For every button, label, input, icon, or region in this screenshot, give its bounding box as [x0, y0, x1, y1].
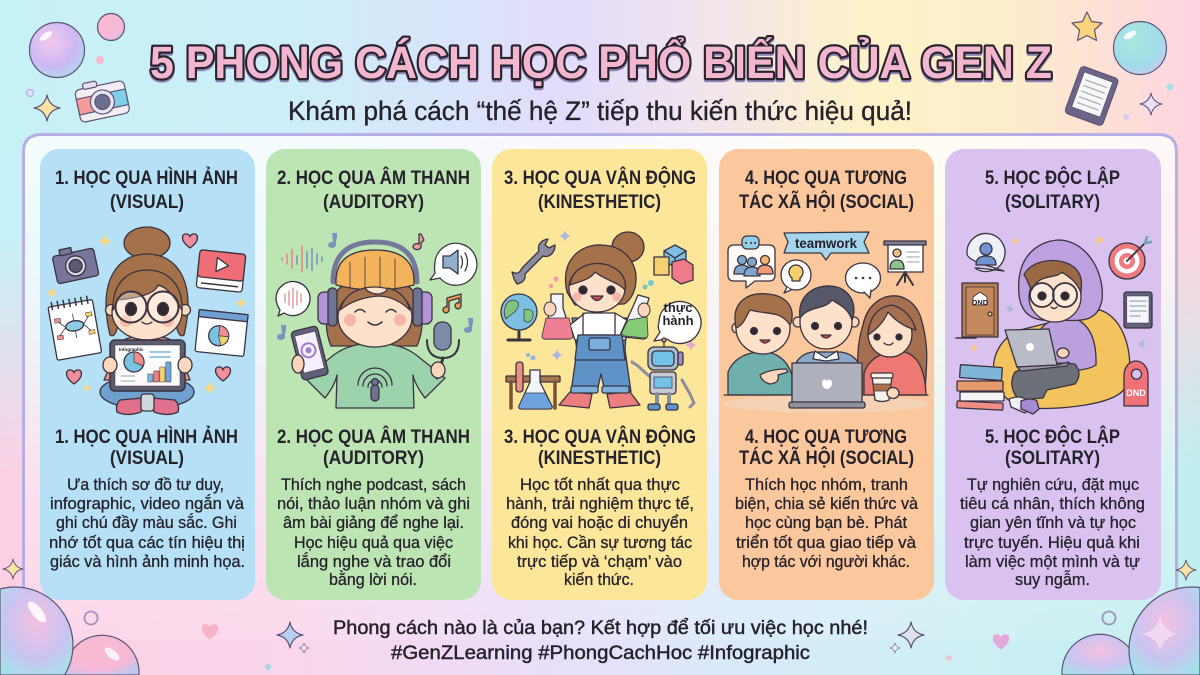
illustration: girl with tablet: Infographic [119, 347, 144, 352]
description: card 2: Thích nghe podcast, sách [281, 475, 466, 494]
description: card 4: Thích học nhóm, tranh [745, 475, 908, 494]
illustration: girl with tablet [46, 227, 248, 414]
heading: card 1 bottom: 1. HỌC QUA HÌNH ẢNH [55, 425, 238, 448]
illustration: three friends with laptop: teamwork [795, 236, 857, 251]
description: card 3: hành, trải nghiệm thực tế, [506, 494, 694, 513]
decoration: top right star, bubble and e-reader [1064, 12, 1174, 126]
heading: card 3 top: (KINESTHETIC) [538, 191, 661, 213]
description: card 4: học cùng bạn bè. Phát [745, 513, 907, 532]
heading: card 5 top [985, 165, 1120, 213]
description: card 5: làm việc một mình và tự [965, 552, 1140, 571]
description: card 3: khi học. Cần sự tương tác [508, 533, 692, 552]
panel: card 4 social [719, 149, 934, 600]
description: card 1: infographic, video ngắn và [50, 494, 245, 513]
main panel [24, 134, 1176, 640]
heading: card 2 top [277, 165, 470, 213]
description: card 5: trực tuyến. Hiệu quả khi [964, 533, 1140, 552]
description: card 5 [960, 475, 1145, 589]
heading: card 1 bottom [55, 425, 238, 469]
heading: card 4 bottom: TÁC XÃ HỘI (SOCIAL) [739, 445, 914, 469]
illustration: girl with flasks [501, 230, 701, 410]
decoration: bottom right bubbles [890, 560, 1200, 675]
description: card 3: đóng vai hoặc di chuyển [511, 513, 688, 532]
footer question: Phong cách nào là của bạn? Kết hợp để tối ưu việc học nhé! [333, 617, 868, 639]
description: card 4: triển tốt qua giao tiếp và [736, 533, 917, 552]
heading: card 3 bottom [504, 424, 696, 469]
description: card 5: suy ngẫm. [1015, 570, 1090, 589]
heading: card 4 bottom: 4. HỌC QUA TƯƠNG [745, 426, 907, 448]
heading: card 3 top [504, 165, 696, 213]
illustration: girl with headphones and podcast [276, 233, 477, 408]
heading: card 5 bottom [985, 424, 1120, 469]
subtitle: Khám phá cách “thế hệ Z” tiếp thu kiến thức hiệu quả! [288, 96, 912, 126]
heading: card 5 bottom: 5. HỌC ĐỘC LẬP [985, 424, 1120, 448]
description: card 5: Tự nghiên cứu, đặt mục [967, 475, 1139, 494]
description: card 1: nhớ tốt qua các tín hiệu thị [49, 533, 245, 552]
decoration: top left bubbles and camera [26, 14, 130, 123]
heading: card 2 top: (AUDITORY) [323, 191, 424, 213]
heading: card 4 top [739, 167, 914, 213]
heading: card 2 bottom: (AUDITORY) [323, 447, 424, 469]
title: 5 PHONG CÁCH HỌC PHỔ BIẾN CỦA GEN Z [150, 37, 1052, 88]
description: card 1: giác và hình ảnh minh họa. [50, 552, 245, 571]
description: card 4 [735, 475, 919, 571]
description: card 1: ghi chú đầy màu sắc. Ghi [56, 513, 237, 532]
heading: card 1 top: 1. HỌC QUA HÌNH ẢNH [55, 166, 238, 189]
heading: card 1 top [55, 166, 238, 213]
illustration: girl with flasks: hành [662, 313, 694, 328]
heading: card 1 bottom: (VISUAL) [110, 447, 184, 469]
description: card 3 [506, 475, 694, 589]
description: card 2: bằng lời nói. [329, 570, 417, 589]
heading: card 5 top: (SOLITARY) [1005, 191, 1100, 213]
description: card 2: lắng nghe và trao đổi [297, 552, 451, 571]
description: card 1: Ưa thích sơ đồ tư duy, [67, 475, 224, 494]
heading: card 4 bottom [739, 426, 914, 469]
panel: card 1 visual [40, 149, 255, 600]
heading: card 4 top: 4. HỌC QUA TƯƠNG [745, 167, 907, 189]
description: card 2: nói, thảo luận nhóm và ghi [277, 494, 470, 513]
description: card 4: hợp tác với người khác. [742, 552, 910, 571]
description: card 2: Học hiệu quả qua việc [294, 533, 453, 552]
illustration: hoodie student on bean bag: DND [1126, 388, 1146, 398]
description: card 2: âm bài giảng để nghe lại. [283, 513, 464, 532]
heading: card 2 top: 2. HỌC QUA ÂM THANH [277, 165, 470, 189]
heading: card 3 bottom: 3. HỌC QUA VẬN ĐỘNG [504, 424, 696, 448]
footer hashtags: #GenZLearning #PhongCachHoc #Infographic [391, 642, 810, 664]
description: card 3: kiến thức. [564, 570, 634, 589]
heading: card 4 top: TÁC XÃ HỘI (SOCIAL) [739, 189, 914, 213]
decoration: bottom left bubbles [0, 559, 309, 675]
illustration: hoodie student on bean bag [956, 234, 1152, 414]
illustration: girl with flasks: thực [664, 300, 692, 315]
description: card 5: gian yên tĩnh và tự học [970, 513, 1136, 532]
description: card 4: biện, chia sẻ kiến thức và [735, 494, 919, 513]
heading: card 5 bottom: (SOLITARY) [1005, 447, 1100, 469]
heading: card 3 bottom: (KINESTHETIC) [538, 447, 661, 469]
panel: card 5 solitary [945, 149, 1161, 600]
heading: card 5 top: 5. HỌC ĐỘC LẬP [985, 165, 1120, 189]
heading: card 1 top: (VISUAL) [110, 191, 184, 213]
heading: card 3 top: 3. HỌC QUA VẬN ĐỘNG [504, 165, 696, 189]
description: card 2 [277, 475, 470, 589]
panel: card 3 kinesthetic [492, 149, 707, 600]
heading: card 2 bottom [277, 424, 470, 469]
description: card 3: trực tiếp và ‘chạm’ vào [517, 552, 682, 571]
description: card 1 [49, 475, 245, 571]
heading: card 2 bottom: 2. HỌC QUA ÂM THANH [277, 424, 470, 448]
illustration: hoodie student on bean bag: DND [972, 298, 989, 307]
description: card 3: Học tốt nhất qua thực [520, 475, 680, 494]
panel: card 2 auditory [266, 149, 481, 600]
illustration: three friends with laptop [723, 232, 929, 413]
description: card 5: tiêu cá nhân, thích không [960, 494, 1145, 513]
